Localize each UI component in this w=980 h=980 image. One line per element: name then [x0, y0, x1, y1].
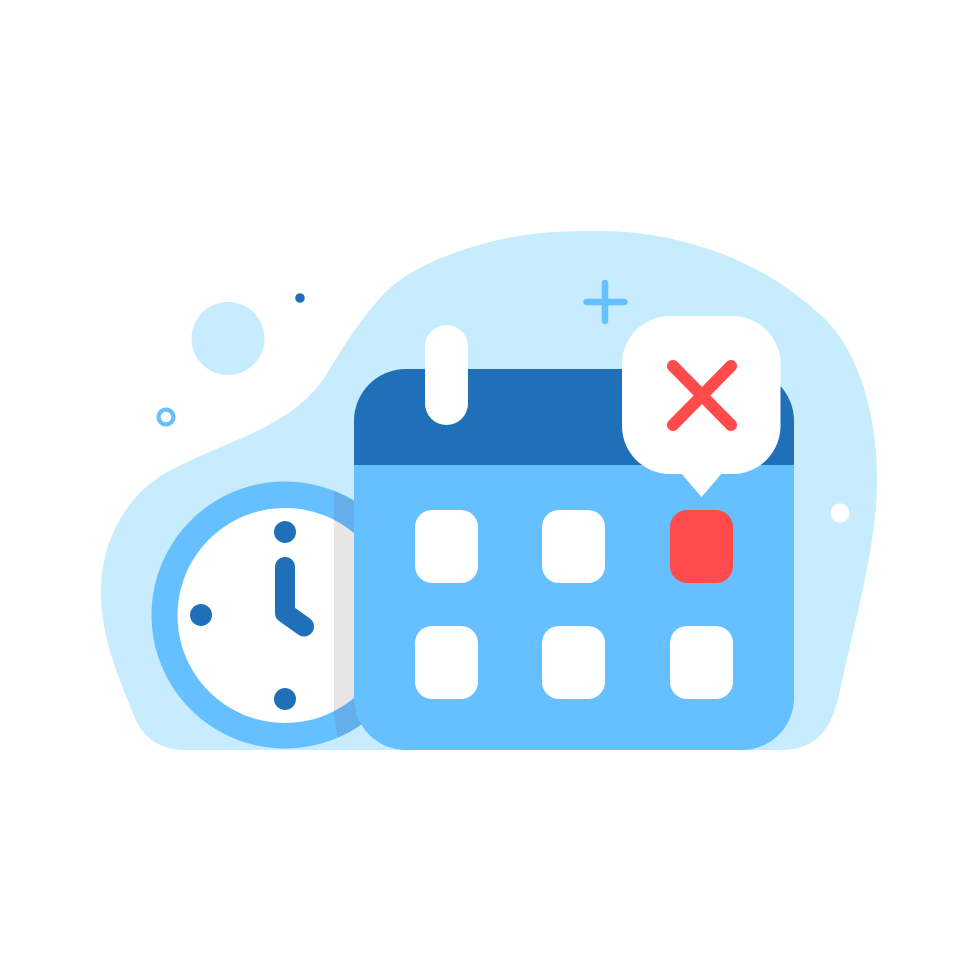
- cross icon: [673, 366, 731, 425]
- clock hands: [285, 567, 304, 626]
- calendar: [354, 325, 794, 750]
- decorative dot dark: [295, 293, 305, 303]
- decorative white dot: [830, 504, 850, 522]
- plus icon: [586, 283, 624, 321]
- calendar header: [354, 369, 794, 465]
- decorative ring: [159, 410, 173, 424]
- calendar ring: [425, 325, 468, 425]
- decorative circle large: [192, 302, 264, 375]
- illustration: calendar cancelled with clock: [101, 231, 877, 750]
- hour markers: [190, 521, 296, 710]
- day cells: [415, 510, 733, 699]
- calendar body: [354, 369, 794, 750]
- speech bubble with cross: [622, 316, 780, 497]
- clock: [152, 482, 362, 748]
- clock shadow: [334, 491, 362, 738]
- background blob: [101, 231, 877, 750]
